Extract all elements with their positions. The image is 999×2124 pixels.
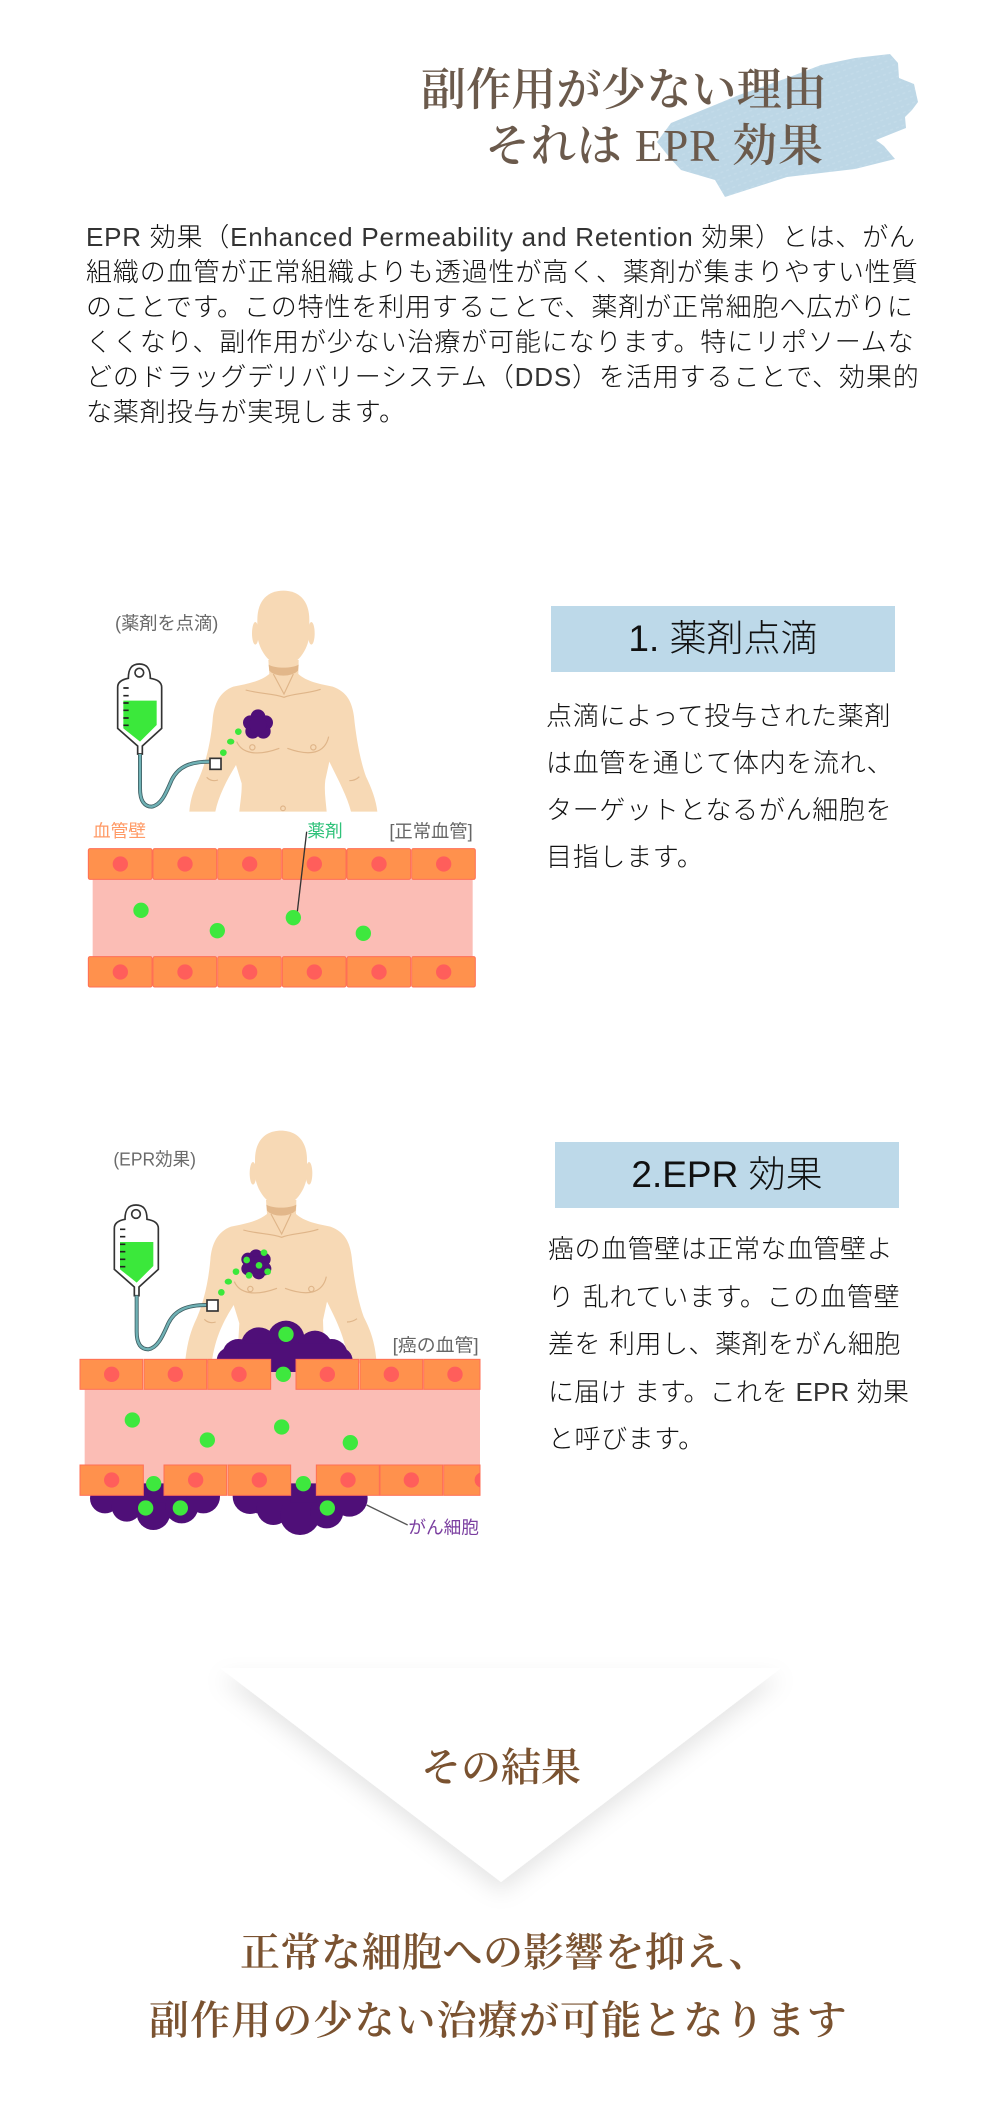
- step 1 heading: 1. 薬剤点滴: [628, 618, 818, 659]
- tumors below vessel: [87, 1479, 368, 1535]
- top wall cells: [80, 1359, 480, 1389]
- conclusion text: [149, 1930, 848, 2043]
- step 2 text: り 乱れています。この血管壁: [548, 1282, 900, 1312]
- title: 副作用が少ない理由: [421, 65, 827, 115]
- drug dots moving toward tumor: [218, 1268, 239, 1296]
- step 1 text: 目指します。: [546, 842, 704, 872]
- step 2 text: と呼びます。: [548, 1424, 705, 1454]
- drug dots moving toward tumor: [220, 728, 242, 756]
- label: normal vessel: [正常血管]: [389, 821, 473, 841]
- icon: IV bag: [118, 664, 221, 807]
- title: それは EPR 効果: [485, 121, 824, 171]
- intro text block: くくなり、副作用が少ない治療が可能になります。特にリポソームな: [86, 327, 915, 357]
- top wall cells: [88, 849, 475, 879]
- step 2 text: 差を 利用し、薬剤をがん細胞: [548, 1329, 901, 1359]
- intro text block: な薬剤投与が実現します。: [86, 397, 406, 427]
- icon: tumor with drug: [241, 1249, 271, 1279]
- drug particles in vessel: [133, 903, 371, 941]
- intro text block: EPR 効果（Enhanced Permeability and Retention 効果）とは、がん: [86, 222, 916, 252]
- label: cancer cells: がん細胞: [408, 1517, 479, 1537]
- decoration: blue brush stroke behind title: [657, 54, 918, 197]
- label: cancer vessel: [癌の血管]: [393, 1336, 479, 1356]
- intro text block: 組織の血管が正常組織よりも透過性が高く、薬剤が集まりやすい性質: [86, 257, 918, 287]
- intro text block: のことです。この特性を利用することで、薬剤が正常細胞へ広がりに: [86, 292, 914, 322]
- arrow: downward triangle with soft shadow: [232, 1680, 768, 1891]
- label: drug: 薬剤: [307, 821, 343, 841]
- intro text block: [86, 222, 920, 427]
- drug particles: [125, 1327, 358, 1516]
- label: vessel wall: 血管壁: [93, 821, 146, 841]
- conclusion text: 副作用の少ない治療が可能となります: [149, 1998, 848, 2043]
- illustration: drug infusion, normal blood vessel: [88, 590, 476, 988]
- icon: tumor: [243, 709, 273, 739]
- step 1 text: [546, 701, 893, 872]
- step 2 text: 癌の血管壁は正常な血管壁よ: [548, 1234, 893, 1264]
- label: EPR effect: (EPR効果): [113, 1149, 196, 1169]
- icon: human torso: [185, 1131, 377, 1363]
- bottom wall cells: [88, 957, 475, 987]
- drug leader line: [297, 832, 307, 912]
- label: infusion: (薬剤を点滴): [115, 613, 218, 633]
- step 2 heading: 2.EPR 効果: [631, 1154, 823, 1195]
- result label: その結果: [421, 1745, 581, 1790]
- step 2 text: [548, 1234, 909, 1454]
- step 1 heading: [551, 606, 895, 672]
- vessel lumen: [93, 879, 473, 957]
- leader line to cancer cells: [367, 1505, 408, 1525]
- intro text block: どのドラッグデリバリーシステム（DDS）を活用することで、効果的: [86, 362, 920, 392]
- tumor above vessel: [217, 1321, 353, 1374]
- step 2 text: に届け ます。これを EPR 効果: [548, 1376, 909, 1406]
- step 2 heading: [555, 1142, 899, 1208]
- title: [421, 65, 827, 171]
- illustration: EPR effect, cancer blood vessel: [80, 1130, 480, 1537]
- step 1 text: ターゲットとなるがん細胞を: [546, 795, 892, 825]
- vessel lumen: [85, 1372, 480, 1483]
- bottom wall cells: [80, 1465, 480, 1495]
- icon: IV bag: [114, 1205, 218, 1349]
- step 1 text: は血管を通じて体内を流れ、: [546, 748, 893, 778]
- icon: human torso: [189, 591, 377, 812]
- conclusion text: 正常な細胞への影響を抑え、: [240, 1930, 769, 1975]
- step 1 text: 点滴によって投与された薬剤: [546, 701, 891, 731]
